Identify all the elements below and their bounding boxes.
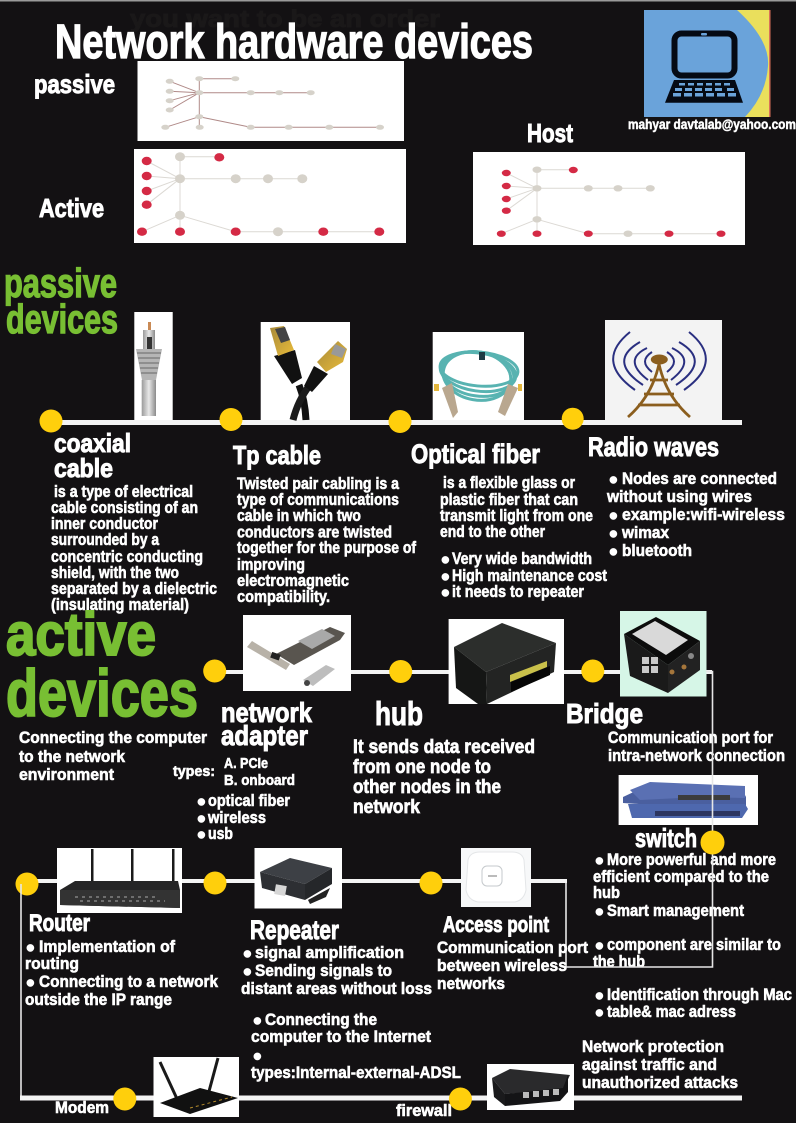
block: radio waves: ● [609,474,618,486]
text: connecting the computer: Connecting the computer [19,729,208,747]
block: modem description [251,1011,461,1082]
block: tp cable: type of communications [237,491,399,509]
block: optical fiber: it needs to repeater [452,583,584,601]
label: firewall: firewall [396,1102,452,1120]
dots: router timeline [16,872,442,896]
image: router [57,848,182,913]
block: coaxial cable: shield, with the two [51,564,179,582]
block: firewall description: Network protection [582,1038,724,1056]
block: tp cable: Tp cable [233,440,321,470]
block: coaxial cable [51,428,217,614]
block: switch: table& mac adress [607,1003,736,1021]
block: switch [593,823,792,1021]
block: access point: Access point [443,912,550,937]
heading: passive devices: passive [4,260,117,306]
block: tp cable [233,440,416,606]
block: radio waves: wimax [621,524,670,542]
block: tp cable: together for the purpose of [237,539,416,557]
block: access point [437,912,588,993]
block: router: Router [29,910,90,937]
block: bridge [566,698,785,765]
block: switch: hub [593,884,620,902]
image: hub [449,619,564,704]
block: modem description: ● [253,1051,262,1062]
text: you want to be an order [130,6,440,33]
label: host: Host [527,118,573,148]
block: radio waves: ● [609,510,618,522]
block: switch: efficient compared to the [593,868,769,886]
block: optical fiber: ● [441,588,450,598]
block: network adapter: usb [208,825,233,843]
router timeline line [27,879,567,883]
block: tp cable: cable in which two [237,507,361,525]
block: switch: Smart management [607,902,744,920]
block: switch: ● [595,1008,604,1018]
block: hub [353,695,535,818]
block: network adapter: ● [197,830,206,840]
block: network adapter: ● [197,796,206,808]
block: radio waves: Nodes are connected [622,470,777,488]
connector: thin line from bridge through switch to access point [566,672,712,967]
heading: active devices: devices [6,656,198,730]
block: optical fiber: transmit light from one [440,507,593,525]
image: repeater [254,848,342,908]
block: optical fiber: end to the other [440,523,545,541]
block: network adapter: A. PCIe [224,755,268,772]
block: bridge: Communication port for [608,729,774,747]
block: switch: the hub [593,953,645,971]
block: switch: ● [595,906,604,918]
block: hub: network [353,797,420,818]
block: switch: switch [635,823,697,853]
block: optical fiber: plastic fiber that can [440,491,578,509]
block: network adapter: B. onboard [224,772,295,789]
block: switch: ● [595,856,604,866]
block: network adapter [173,697,312,843]
block: router [25,910,219,1009]
block: coaxial cable: surrounded by a [51,531,160,549]
image: network adapter [243,615,351,691]
block: coaxial cable: inner conductor [51,515,158,533]
block: repeater: distant areas without loss [241,980,432,998]
block: firewall description: against traffic and [582,1056,717,1074]
block: coaxial cable: concentric conducting [51,548,203,566]
block: coaxial cable: cable [54,453,113,483]
block: modem description: Connecting the [265,1011,377,1029]
block: hub: other nodes in the [353,777,501,798]
image: modem [154,1057,239,1117]
block: access point: Communication port [437,939,588,957]
block: access point: between wireless [437,957,567,975]
heading: active devices [6,601,198,730]
block: tp cable: compatibility. [237,588,330,606]
block: coaxial cable: (insulating material) [51,596,189,614]
block: optical fiber: is a flexible glass or [443,474,575,492]
block: tp cable: conductors are twisted [237,524,392,542]
block: repeater: signal amplification [255,944,404,962]
image: firewall [487,1064,574,1110]
block: radio waves: without using wires [606,488,752,506]
block: radio waves: example:wifi-wireless [622,506,785,524]
dots: bottom timeline [113,1088,472,1110]
block: tp cable: electromagnetic [237,572,349,590]
title: Network hardware devices [55,16,533,69]
icon: laptop logo [644,10,770,117]
block: network adapter: types: [173,763,215,780]
block: optical fiber: ● [441,572,450,582]
block: firewall description: unauthorized attacks [582,1074,738,1092]
block: radio waves: bluetooth [622,542,692,560]
block: optical fiber: ● [441,554,450,566]
dots: active timeline [203,660,724,854]
block: tp cable: Twisted pair cabling is a [237,475,400,493]
heading: passive devices [4,260,118,342]
heading: active devices: active [6,601,156,668]
block: radio waves [588,432,785,560]
label: active: Active [39,193,104,223]
block: optical fiber [411,439,607,601]
block: modem description: computer to the Internet [251,1028,431,1046]
block: modem description: types:Internal-external-ADSL [251,1064,461,1082]
block: repeater: Sending signals to [255,962,392,980]
block: repeater: Repeater [250,915,339,945]
block: coaxial cable: cable consisting of an [51,499,198,517]
image: bridge [620,611,706,696]
dots: passive timeline [40,408,584,433]
block: bridge: Bridge [566,698,643,729]
image: radio waves tower [605,320,722,420]
label: passive: passive [34,69,115,99]
block: router: ● [26,942,35,954]
block: modem description: ● [253,1016,262,1026]
block: optical fiber: Very wide bandwidth [452,550,592,568]
panel: active network diagram [134,149,406,243]
block: firewall description [582,1038,738,1092]
block: network adapter: network [221,697,312,728]
block: hub: hub [375,695,423,732]
block: optical fiber: Optical fiber [411,439,540,469]
panel: passive network diagram [138,61,404,141]
block: coaxial cable: separated by a dielectric [51,580,217,598]
block: router: Implementation of [39,938,175,956]
text: connecting the computer: environment [19,766,114,784]
block: switch: ● [595,990,604,1002]
block: tp cable: improving [237,556,305,574]
block: coaxial cable: is a type of electrical [54,483,193,501]
passive timeline line [42,420,742,425]
block: hub: from one node to [353,757,491,778]
block: network adapter: adapter [221,720,308,751]
bottom timeline line [20,1096,742,1100]
block: radio waves: Radio waves [588,432,719,462]
block: radio waves: ● [609,546,618,558]
block: switch: ● [595,940,604,952]
panel: host network diagram [473,152,745,245]
block: network adapter: ● [197,814,206,824]
label: modem: Modem [55,1099,109,1117]
block: network adapter: optical fiber [208,792,291,810]
block: network adapter: wireless [207,809,266,827]
block: radio waves: ● [609,528,618,540]
heading: passive devices: devices [6,296,118,342]
image: twisted pair cable [261,322,350,420]
image: coaxial cable [134,312,173,420]
block: optical fiber: High maintenance cost [452,567,607,585]
block: hub: It sends data received [353,737,535,758]
block: router: routing [25,955,79,973]
block: repeater: ● [243,966,252,978]
image: optical fiber [433,332,524,420]
image: access point [461,848,531,907]
text: connecting the computer [19,729,208,784]
block: router: outside the IP range [25,991,172,1009]
block: repeater [241,915,432,998]
block: router: Connecting to a network [39,973,219,991]
connector: thin line from router down to modem [20,884,22,1098]
image: switch [619,775,758,825]
block: coaxial cable: coaxial [54,428,131,458]
block: router: ● [26,978,35,988]
active timeline line [204,670,712,674]
block: switch: More powerful and more [607,851,776,869]
text: connecting the computer: to the network [19,748,126,766]
block: access point: networks [437,975,505,993]
block: repeater: ● [243,948,252,960]
